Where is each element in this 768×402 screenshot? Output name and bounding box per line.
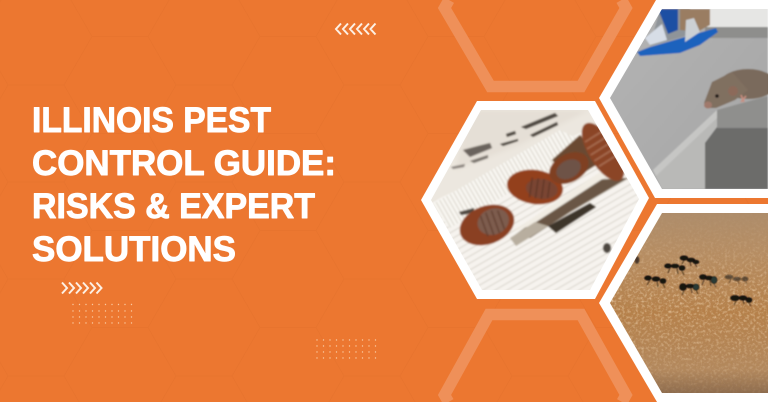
outline hexagon: bottom bbox=[444, 314, 626, 402]
ants bbox=[635, 256, 752, 306]
cabinet below counter bbox=[653, 96, 768, 189]
mouse bbox=[704, 69, 768, 108]
dish rack bbox=[637, 9, 718, 56]
photo hexagon: bed bugs bbox=[421, 101, 649, 299]
title: ILLINOIS PEST bbox=[32, 101, 271, 140]
seam bbox=[510, 135, 628, 246]
bed bug bodies bbox=[458, 122, 625, 247]
counter and wall bbox=[605, 5, 768, 195]
dot grid: lower centre bbox=[317, 340, 377, 358]
title: RISKS & EXPERT bbox=[32, 187, 315, 226]
dot grid: lower left bbox=[73, 304, 133, 323]
dark specks on fabric bbox=[451, 113, 611, 253]
title bbox=[32, 101, 336, 269]
outline hexagon: top bbox=[444, 0, 626, 86]
title: CONTROL GUIDE: bbox=[32, 144, 336, 183]
fabric bbox=[431, 110, 639, 290]
photo hexagon: ants on sand bbox=[599, 204, 768, 402]
icon: right-pointing chevrons bbox=[62, 282, 102, 294]
icon: left-pointing chevrons bbox=[336, 24, 376, 34]
title: SOLUTIONS bbox=[32, 230, 236, 269]
sand surface bbox=[605, 208, 768, 398]
photo hexagon: mouse on counter bbox=[599, 0, 768, 198]
